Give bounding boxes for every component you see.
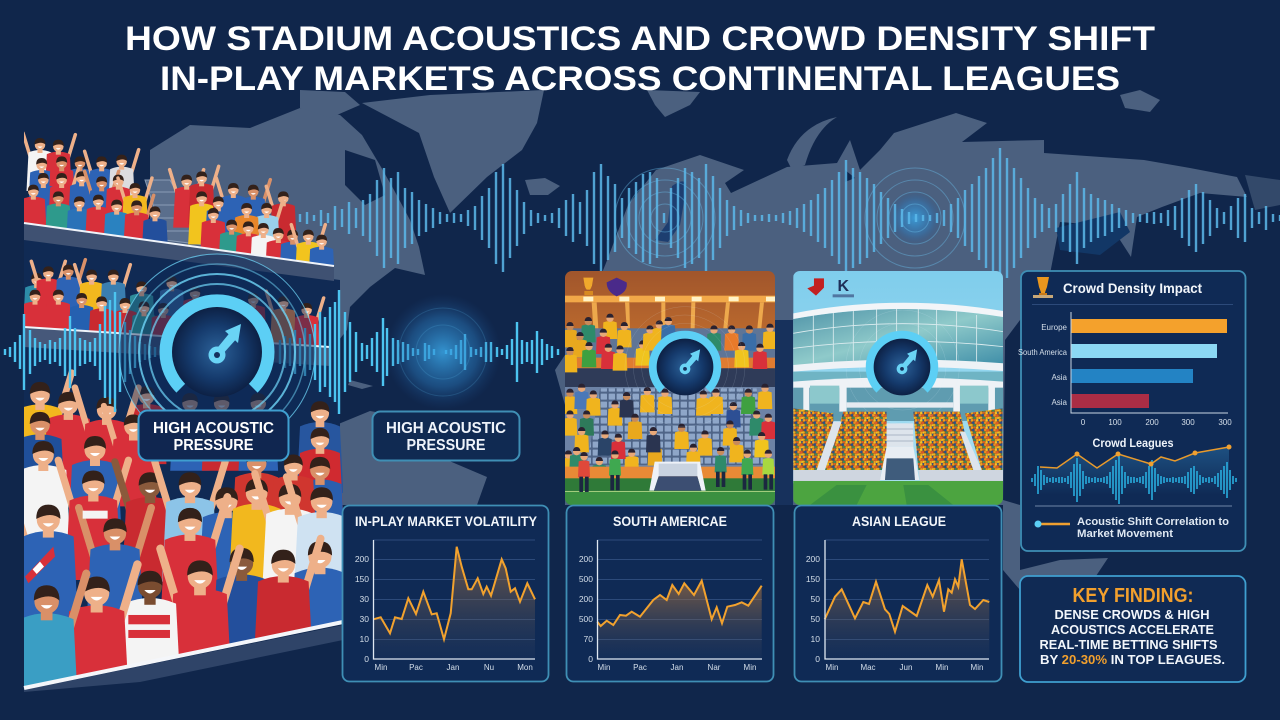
callout: key finding: KEY FINDING: [1072,585,1194,607]
chart: in-play market volatility: 150 [355,574,369,584]
label: high acoustic pressure, map [372,412,520,460]
chart: south america: 500 [579,574,593,584]
legend: Acoustic Shift Correlation to [1077,516,1229,528]
bar chart: 100 [1108,418,1122,427]
crowd backdrop [24,240,340,690]
callout: key finding: BY 20-30% IN TOP LEAGUES. [1040,652,1225,667]
chart: asian league: Mac [860,663,876,672]
stand base [793,470,1003,481]
stadium fans [561,314,777,482]
panel: crowd density impact [1018,271,1246,551]
pitch [793,481,1003,506]
bar chart: Asia [1051,373,1068,382]
legend: Market Movement [1077,528,1173,540]
callout: key finding: REAL-TIME BETTING SHIFTS [1040,637,1218,652]
chart: asian league: Jun [900,663,912,672]
crowd: front tier [11,373,350,709]
chart: south america: 70 [584,634,593,644]
chart: south america: 0 [588,654,593,664]
chart: asian league: Min [826,663,838,672]
chart: south america: SOUTH AMERICAE [613,514,727,529]
title: HOW STADIUM ACOUSTICS AND CROWD DENSITY SHIFT [125,20,1155,58]
map inland seas [345,150,1130,505]
panel: south american stadium [561,270,777,505]
bar chart [1018,312,1232,427]
lower seats [565,387,775,469]
chart: in-play market volatility: Pac [409,663,423,672]
chart: south america: 500 [579,614,593,624]
middle sound wave [5,290,558,414]
rings [625,307,745,427]
top tier fans [24,132,334,265]
bar chart: South America [1018,348,1068,357]
callout: key finding: ACOUSTICS ACCELERATE [1051,622,1214,637]
rings [846,310,959,423]
chart: south america: 200 [579,594,593,604]
title [125,20,1155,98]
upper stand [565,328,775,359]
chart: in-play market volatility: 30 [360,594,369,604]
roof [793,303,1003,319]
top tier ledge [24,223,334,281]
legend [1034,516,1229,540]
acoustic glow [385,294,501,410]
middle tier ledge [24,327,330,366]
bar chart: Asia [1051,398,1068,407]
pitch edge board and field [565,467,775,505]
chart: in-play market volatility: Nu [484,663,494,672]
chart: asian league: Min [971,663,983,672]
panel heading: Crowd Density Impact [1063,281,1202,296]
title: IN-PLAY MARKETS ACROSS CONTINENTAL LEAGUES [160,60,1120,98]
acoustic correlation chart [1032,444,1236,504]
chart: asian league: 150 [806,574,820,584]
crowd: top tier [24,132,334,265]
label: high acoustic pressure, crowd [138,410,288,460]
chart: in-play market volatility: 0 [364,654,369,664]
chart: in-play market volatility: IN-PLAY MARKET VOLATILITY [355,514,537,529]
floodlight bar [565,296,776,328]
label: high acoustic pressure, map: PRESSURE [406,437,486,454]
chart: in-play market volatility: Jan [447,663,459,672]
chart: in-play market volatility [342,506,548,682]
chart: asian league: 50 [811,594,820,604]
label: high acoustic pressure, crowd: PRESSURE [174,437,254,454]
stadium glass facade [793,306,1003,365]
label: high acoustic pressure, crowd: HIGH ACOUSTIC [153,420,274,437]
chart: south america: Jan [671,663,683,672]
players [578,447,774,492]
acoustic gauge: crowd [119,254,315,450]
chart: in-play market volatility: 200 [355,554,369,564]
chart: south america: Pac [633,663,647,672]
chart: in-play market volatility: Min [375,663,387,672]
panel: asian stadium [793,270,1003,506]
bar chart: 300 [1218,418,1232,427]
chart: asian league: 200 [806,554,820,564]
chart: in-play market volatility: 30 [360,614,369,624]
logos: league badges: K [838,278,850,295]
world map [150,90,1280,590]
chart: in-play market volatility: Mon [517,663,533,672]
chart: in-play market volatility: 10 [360,634,369,644]
top sound wave [300,148,1280,288]
gauge: asian stadium [870,335,934,395]
logos: league badges [807,278,854,297]
chart: south america: Nar [708,663,721,672]
chart: south america: Min [744,663,756,672]
label: high acoustic pressure, map: HIGH ACOUSTIC [386,420,506,437]
stairs and tunnel [817,422,982,480]
sound rings on map [615,168,965,268]
chart: asian league: ASIAN LEAGUE [852,514,946,529]
bar chart: 200 [1145,418,1159,427]
stand stairs [145,180,205,245]
callout: key finding: DENSE CROWDS & HIGH [1054,607,1210,622]
icon: trophy [1033,277,1053,298]
bar chart: 0 [1081,418,1086,427]
chart: south america: Min [598,663,610,672]
logos: trophy and club badge [583,278,627,296]
chart: south america: 200 [579,554,593,564]
goal [649,462,706,491]
bar chart: Europe [1041,323,1068,332]
crowd: middle tier [21,260,324,356]
chart: asian league: 10 [811,634,820,644]
chart: south america [566,506,774,682]
packed stands [793,408,1003,470]
facade lower tiers [793,360,1003,421]
chart: asian league: 50 [811,614,820,624]
callout: key finding [1020,576,1246,682]
bar chart: 300 [1181,418,1195,427]
front ledge [24,622,343,692]
chart: asian league [794,506,1002,682]
subheading: Crowd Leagues [1092,436,1174,450]
gauge: south american stadium [653,335,717,395]
chart: asian league: 0 [815,654,820,664]
chart: asian league: Min [936,663,948,672]
